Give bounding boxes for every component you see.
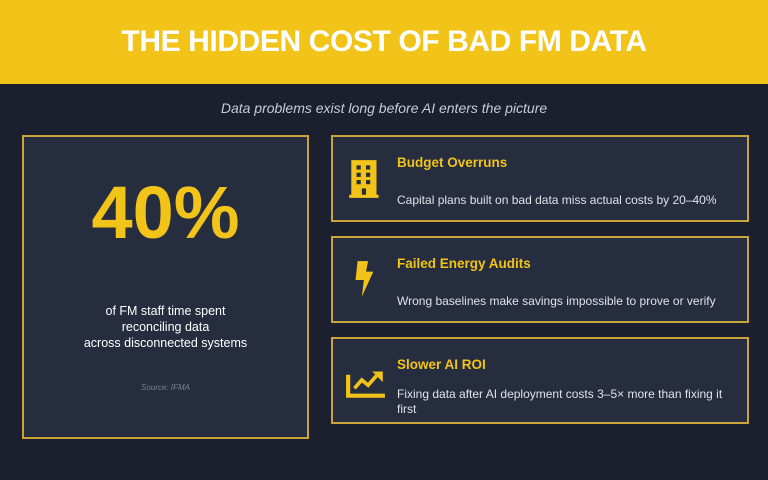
card: slower AI ROI: Fixing data after AI deployment costs 3–5× more than fixing it first (397, 387, 722, 416)
icon: building (349, 160, 379, 198)
header (0, 0, 768, 84)
card: budget overruns (331, 135, 749, 222)
card: failed energy audits: Failed Energy Audits (397, 256, 531, 271)
card: budget overruns: Capital plans built on bad data miss actual costs by 20–40% (397, 193, 717, 207)
header: THE HIDDEN COST OF BAD FM DATA (121, 25, 647, 58)
stat number: 40% (91, 171, 240, 254)
card: slower AI ROI (331, 337, 749, 424)
card: budget overruns: Budget Overruns (397, 155, 507, 170)
icon: chart (346, 372, 385, 398)
stat description: of FM staff time spent (106, 304, 225, 318)
subtitle: Data problems exist long before AI enters the picture (221, 100, 547, 116)
panel: stat 40% (22, 135, 309, 439)
card: failed energy audits: Wrong baselines make savings impossible to prove or verify (397, 294, 716, 308)
stat description (84, 304, 247, 350)
card: failed energy audits (331, 236, 749, 323)
stat description: reconciling data (122, 320, 209, 334)
stat description: across disconnected systems (84, 336, 247, 350)
card: slower AI ROI: Slower AI ROI (397, 357, 486, 372)
icon: lightning (356, 261, 374, 296)
source: Source: IFMA (141, 383, 190, 392)
